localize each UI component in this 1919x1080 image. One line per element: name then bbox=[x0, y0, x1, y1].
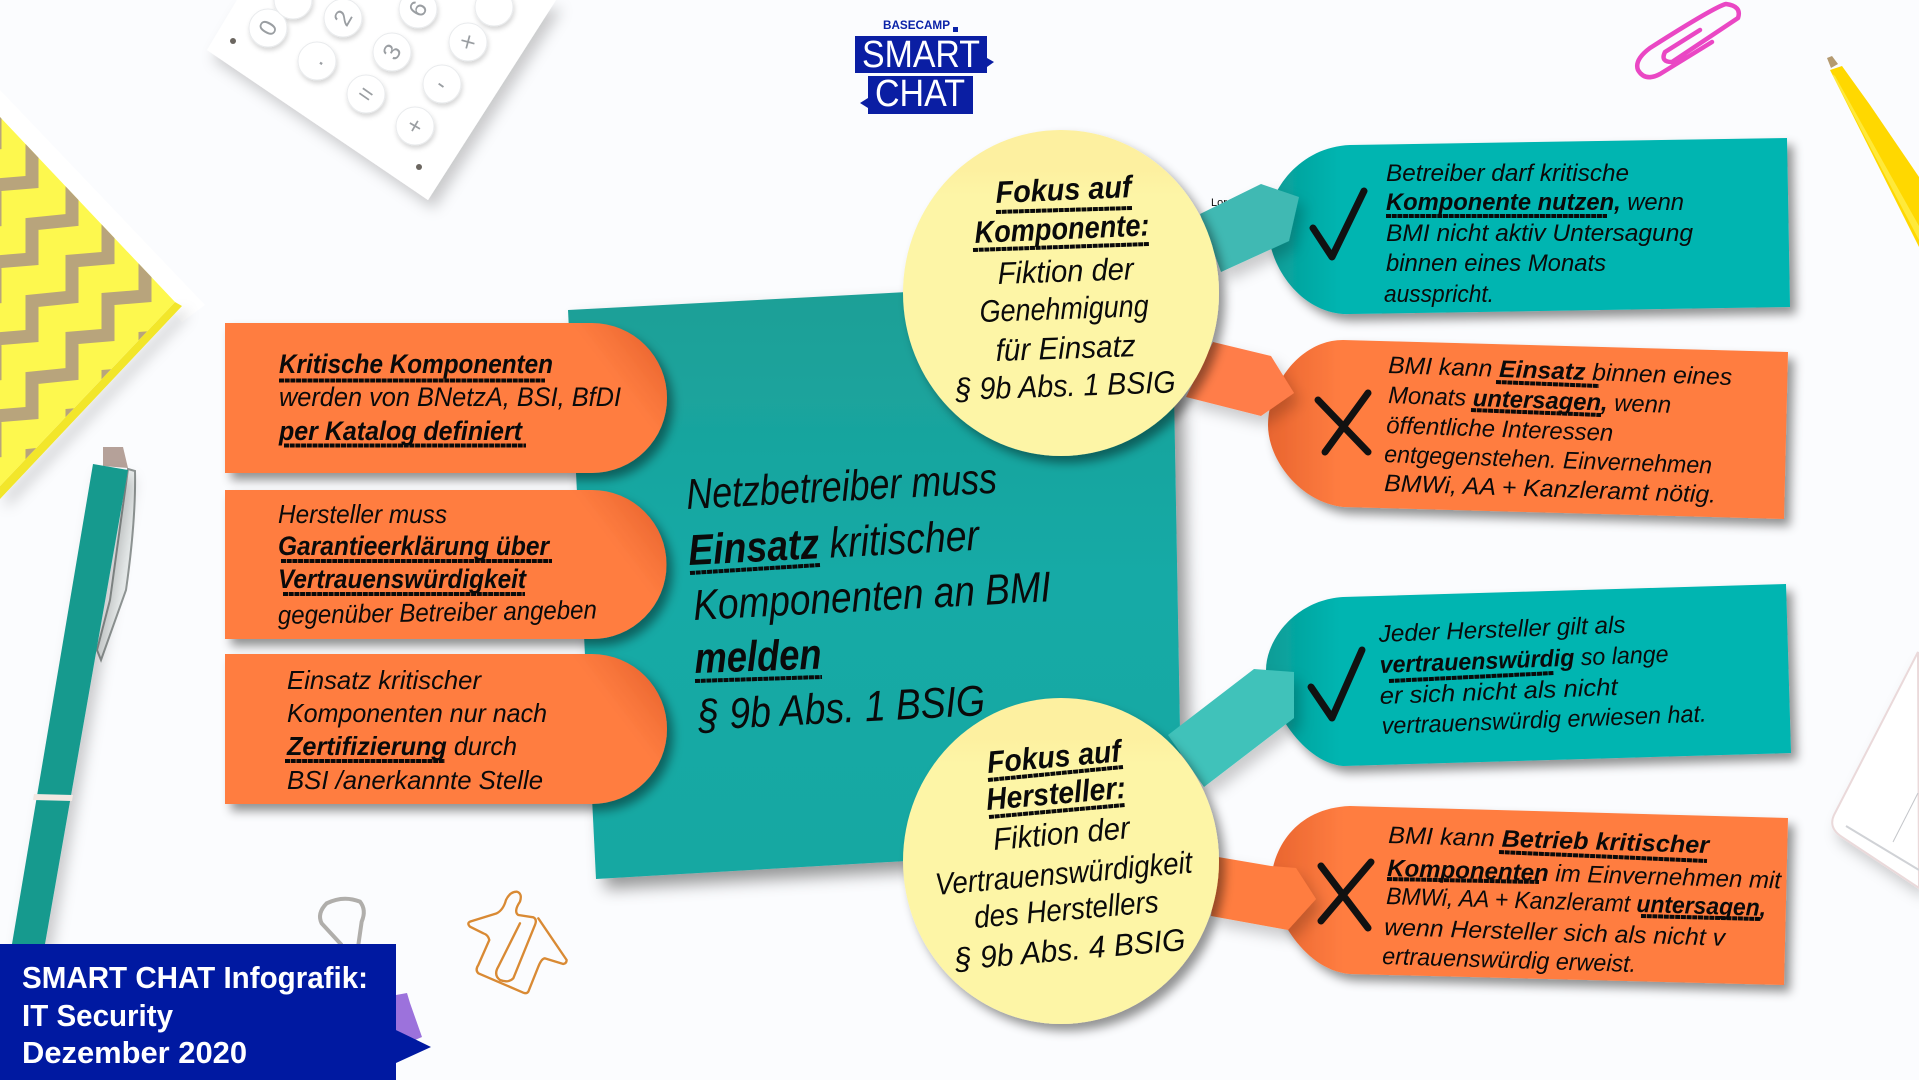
panel: circle Fokus auf Hersteller: Fiktion der bbox=[992, 810, 1133, 857]
calculator: - bbox=[431, 71, 453, 98]
panel: teal tag top: ausspricht. bbox=[1384, 281, 1494, 308]
footer banner: Dezember 2020 bbox=[22, 1035, 247, 1070]
panel: orange tab 1: per Katalog definiert bbox=[278, 416, 523, 446]
calculator: 0 bbox=[253, 16, 283, 41]
panel: teal tag bottom: vertrauenswürdig erwiesen hat. bbox=[1381, 701, 1707, 740]
yellow pen bbox=[1827, 56, 1919, 247]
panel: orange tab 3: Einsatz kritischer bbox=[287, 665, 482, 695]
panel: orange tab 2 bbox=[225, 490, 666, 639]
panel: orange tag bottom bbox=[1271, 806, 1788, 985]
panel: circle Fokus auf Hersteller: Hersteller: bbox=[985, 770, 1127, 817]
connector: orange top bbox=[1186, 342, 1294, 416]
panel: orange tab 2: Garantieerklärung über bbox=[278, 531, 550, 561]
logo: Basecamp Smart Chat: BASECAMP bbox=[883, 20, 950, 32]
notebook bbox=[0, 117, 188, 506]
pink paperclip bbox=[1637, 4, 1739, 77]
calculator bbox=[207, 0, 556, 200]
panel: orange tag top: entgegenstehen. Einvernehmen bbox=[1384, 441, 1713, 479]
panel: circle Fokus auf Hersteller bbox=[903, 698, 1219, 1024]
panel: circle Fokus auf Hersteller: § 9b Abs. 4 BSIG bbox=[953, 922, 1187, 977]
tiny leftover label: Lorem ipsum bbox=[1211, 197, 1275, 209]
connector: teal top bbox=[1200, 184, 1299, 272]
panel: orange tab 3: Komponenten nur nach bbox=[287, 698, 547, 728]
silver binder clip bbox=[320, 899, 364, 945]
panel: orange tag top: BMWi, AA + Kanzleramt nötig. bbox=[1384, 470, 1717, 509]
panel: circle Fokus auf Komponente: für Einsatz bbox=[995, 328, 1137, 368]
panel: circle Fokus auf Komponente bbox=[903, 130, 1219, 456]
panel: orange tag bottom: Komponenten im Einvernehmen mit bbox=[1387, 855, 1783, 894]
panel: teal tag top: Komponente nutzen, wenn bbox=[1386, 189, 1684, 216]
panel: orange tag top bbox=[1268, 340, 1788, 519]
footer banner: SMART CHAT Infografik: bbox=[22, 960, 368, 995]
connector: teal bottom bbox=[1168, 669, 1294, 787]
footer banner: IT Security bbox=[22, 998, 174, 1033]
main note text: Netzbetreiber muss bbox=[685, 455, 998, 519]
icon: cross mark top bbox=[1318, 393, 1368, 452]
panel: orange tag bottom: wenn Hersteller sich als nicht v bbox=[1384, 914, 1728, 952]
main note text: Komponenten an BMI bbox=[692, 563, 1052, 630]
panel: orange tag bottom: ertrauenswürdig erweist. bbox=[1382, 943, 1637, 978]
panel: orange tab 2: Vertrauenswürdigkeit bbox=[278, 564, 527, 594]
panel: circle Fokus auf Komponente: § 9b Abs. 1 BSIG bbox=[954, 364, 1176, 407]
panel: orange tag bottom: BMWi, AA + Kanzleramt untersagen, bbox=[1386, 883, 1766, 922]
panel: teal tag top: binnen eines Monats bbox=[1386, 250, 1606, 277]
teal pen bbox=[12, 447, 135, 944]
panel: orange tab 1: werden von BNetzA, BSI, BfDI bbox=[279, 382, 621, 412]
connector: orange bottom bbox=[1211, 857, 1316, 930]
panel: orange tab 1: Kritische Komponenten bbox=[279, 349, 553, 379]
panel: circle Fokus auf Komponente: Komponente: bbox=[974, 207, 1150, 250]
calculator: × bbox=[455, 27, 481, 58]
panel: orange tab 1 bbox=[225, 323, 667, 473]
panel: orange tab 3 bbox=[225, 654, 667, 804]
main note text bbox=[685, 455, 1052, 740]
panel: teal tag top: Betreiber darf kritische bbox=[1386, 160, 1629, 187]
panel: orange tag top: öffentliche Interessen bbox=[1386, 412, 1614, 447]
panel: teal tag bottom bbox=[1266, 584, 1791, 766]
panel: circle Fokus auf Hersteller: Vertrauenswürdigkeit bbox=[934, 845, 1195, 902]
panel: orange tab 2: Hersteller muss bbox=[278, 499, 447, 529]
panel: circle Fokus auf Hersteller: Fokus auf bbox=[986, 733, 1125, 780]
panel: orange tab 3: BSI /anerkannte Stelle bbox=[287, 765, 543, 795]
icon: check mark top bbox=[1313, 191, 1364, 257]
panel: circle Fokus auf Komponente: Genehmigung bbox=[979, 288, 1149, 329]
panel: teal tag bottom: vertrauenswürdig so lange bbox=[1379, 641, 1669, 679]
purple binder clip bbox=[396, 993, 422, 1040]
panel: orange tag top: BMI kann Einsatz binnen eines bbox=[1388, 352, 1733, 391]
panel: orange tag bottom: BMI kann Betrieb kritischer bbox=[1388, 822, 1711, 859]
panel: main sticky note bbox=[568, 278, 1182, 879]
main note text: Einsatz kritischer bbox=[687, 512, 982, 575]
panel: circle Fokus auf Komponente: Fiktion der bbox=[997, 251, 1136, 291]
main note text: § 9b Abs. 1 BSIG bbox=[696, 677, 986, 740]
icon: cross mark bottom bbox=[1321, 862, 1371, 928]
logo: Basecamp Smart Chat: SMART bbox=[862, 34, 980, 76]
panel: orange tag top: Monats untersagen, wenn bbox=[1388, 382, 1672, 419]
calculator: + bbox=[402, 111, 428, 142]
panel: orange tab 3: Zertifizierung durch bbox=[286, 731, 517, 761]
calculator: . bbox=[302, 51, 329, 70]
orange paperclip bbox=[468, 892, 567, 993]
panel: circle Fokus auf Komponente: Fokus auf bbox=[995, 169, 1135, 210]
calculator: = bbox=[352, 79, 379, 109]
footer banner bbox=[0, 944, 431, 1080]
logo: Basecamp Smart Chat bbox=[855, 20, 994, 115]
panel: teal tag bottom: er sich nicht als nicht bbox=[1379, 674, 1619, 710]
icon: check mark bottom bbox=[1311, 650, 1362, 718]
phone bbox=[1832, 652, 1919, 888]
panel: teal tag top: BMI nicht aktiv Untersagung bbox=[1386, 220, 1694, 247]
panel: teal tag top bbox=[1268, 138, 1790, 314]
logo: Basecamp Smart Chat: CHAT bbox=[875, 73, 965, 115]
panel: circle Fokus auf Hersteller: des Herstellers bbox=[973, 884, 1160, 935]
panel: orange tab 2: gegenüber Betreiber angeben bbox=[278, 594, 597, 630]
panel: teal tag bottom: Jeder Hersteller gilt als bbox=[1377, 612, 1626, 648]
main note text: melden bbox=[694, 631, 822, 683]
calculator: 3 bbox=[377, 40, 407, 65]
calculator: 2 bbox=[328, 6, 358, 31]
